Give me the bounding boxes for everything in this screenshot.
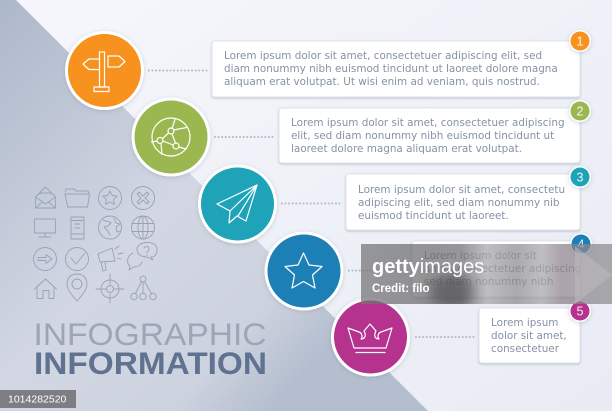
icon: speech bubbles (128, 242, 157, 270)
step 5 circle: crown (331, 298, 410, 376)
badge 3: 3 (577, 170, 584, 184)
icon: envelope (36, 187, 56, 208)
title (34, 316, 267, 381)
step 2 text box: elit, sed diam nonummy nibh euismod tincidunt ut (291, 130, 554, 142)
step 3 text box: euismod tincidunt ut laoreet. (358, 210, 509, 222)
step 1 text box: aliquam erat volutpat. Ut wisi enim ad veniam, quis nostrud. (224, 76, 540, 88)
badge 1 (569, 30, 591, 52)
title: INFORMATION (34, 345, 267, 381)
icon: house (34, 279, 56, 298)
step 3 text box: Lorem ipsum dolor sit amet, consectetu (358, 184, 565, 196)
step 3 connector (281, 202, 342, 204)
step 1 text box (212, 41, 580, 97)
icon: location pin (67, 274, 87, 301)
step 2 text box: laoreet dolore magna aliquam erat volutpat. (291, 143, 522, 155)
step 4 circle: star (264, 232, 344, 310)
icon: earth (98, 216, 122, 239)
icon: arrow badge (34, 248, 56, 270)
icon: phone (71, 217, 84, 239)
badge 2 (569, 100, 591, 122)
badge 5: 5 (577, 304, 584, 318)
badge 5 (569, 300, 591, 322)
step 1 text box: diam nonummy nibh euismod tincidunt ut laoreet dolore magna (224, 63, 558, 75)
icon: hierarchy (131, 276, 156, 300)
badge 4: 4 (578, 238, 585, 252)
icon: signpost (83, 52, 125, 92)
icon: star (285, 253, 322, 288)
step 5 text box: Lorem ipsum (491, 317, 558, 329)
watermark band (361, 244, 612, 310)
step 2 circle: globe network (132, 98, 210, 176)
image id tag: 1014282520 (8, 394, 67, 406)
icon: target (96, 274, 124, 303)
step 2 connector (214, 136, 275, 138)
step 2 text box (279, 108, 580, 163)
icon: monitor (34, 219, 56, 237)
step 2 text box: Lorem ipsum dolor sit amet, consectetuer adipiscing (291, 117, 565, 129)
diagonal grey panel (0, 0, 428, 411)
step 1 connector (148, 70, 209, 72)
icon grid (34, 186, 157, 303)
step 3 circle: paper plane (198, 164, 277, 244)
watermark band: gettyimages (372, 256, 484, 278)
step 5 text box: consectetuer (491, 343, 560, 355)
icon: folder (65, 189, 90, 207)
step 4 text box: amet, consectetuer adipiscing (424, 263, 581, 275)
badge 2: 2 (577, 104, 584, 118)
badge 3 (569, 166, 591, 188)
step 5 text box (479, 308, 580, 363)
icon: network globe (152, 118, 190, 156)
step 1 text box: Lorem ipsum dolor sit amet, consectetuer adipiscing elit, sed (224, 50, 542, 62)
step 5 text box: dolor sit amet, (491, 330, 567, 342)
icon: megaphone (98, 246, 123, 271)
step 5 connector (415, 336, 476, 338)
step 1 circle: signpost (65, 31, 144, 110)
icon: paper plane (217, 185, 257, 223)
step 3 text box: adipiscing elit, sed diam nonummy nib (358, 197, 560, 209)
image id tag (0, 390, 76, 408)
step 4 text box: Lorem ipsum dolor sit (424, 250, 537, 262)
icon: web globe (132, 216, 154, 239)
watermark band: Credit: filo (372, 283, 430, 295)
step 4 connector (348, 270, 409, 272)
step 4 text box: sed diam nonummy nibh (424, 276, 553, 288)
step 4 text box (412, 241, 581, 297)
title: INFOGRAPHIC (34, 316, 266, 352)
badge 1: 1 (577, 34, 584, 48)
badge 4 (570, 233, 592, 255)
icon: check badge (66, 248, 88, 270)
icon: star badge (98, 186, 122, 210)
icon: crown (348, 324, 392, 352)
step 3 text box (346, 174, 580, 230)
icon: close badge (132, 186, 154, 210)
